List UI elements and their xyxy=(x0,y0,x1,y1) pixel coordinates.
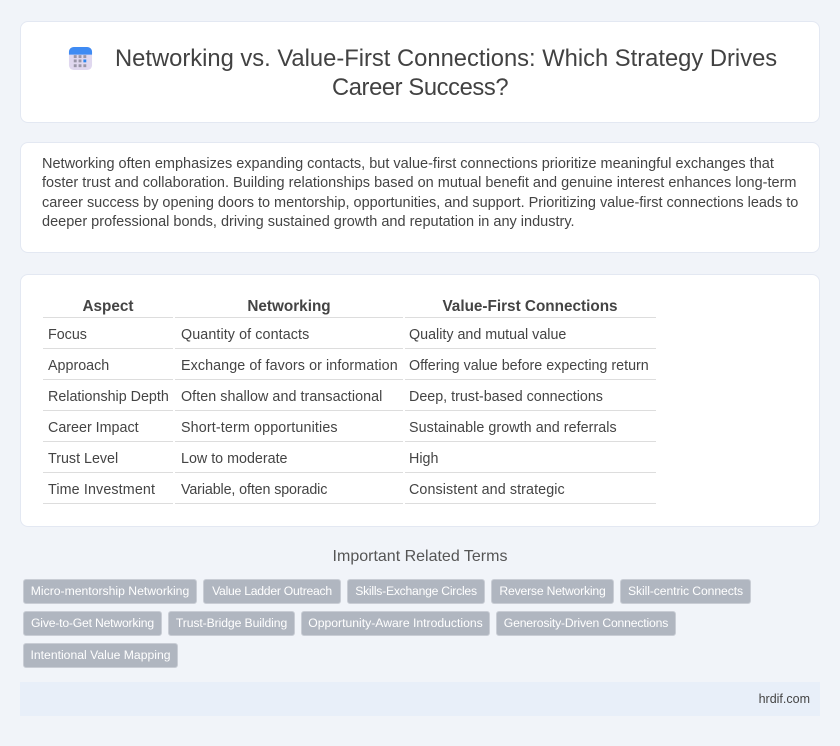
footer bar xyxy=(20,682,820,716)
comparison table: Variable, often sporadic xyxy=(181,482,327,498)
related term tags: Trust-Bridge Building xyxy=(176,616,287,630)
comparison table: Short-term opportunities xyxy=(181,420,338,436)
related term tags: Skills-Exchange Circles xyxy=(355,584,477,598)
comparison table: Time Investment xyxy=(48,482,155,498)
related term tags: Intentional Value Mapping xyxy=(30,648,171,662)
panel: intro paragraph xyxy=(20,142,820,253)
related term tags: Give-to-Get Networking xyxy=(31,616,154,630)
intro text: foster trust and collaboration. Building relationships based on mutual benefit and genuine interest enhances long-term xyxy=(42,175,796,191)
related term tags: Generosity-Driven Connections xyxy=(504,616,668,630)
heading: related terms: Important Related Terms xyxy=(333,548,507,565)
related term tags: Micro-mentorship Networking xyxy=(31,584,189,598)
icon: calendar grid xyxy=(68,47,92,70)
comparison table: Approach xyxy=(48,358,109,374)
intro text: career success by opening doors to mentorship, opportunities, and support. Prioritizing value-first connections leads to xyxy=(42,195,798,211)
footer source: hrdif.com xyxy=(759,692,810,706)
comparison table: Focus xyxy=(48,327,87,343)
intro text xyxy=(42,156,798,230)
comparison table: Sustainable growth and referrals xyxy=(409,420,617,436)
comparison table: Offering value before expecting return xyxy=(409,358,649,374)
related term tags: Reverse Networking xyxy=(499,584,606,598)
comparison table: Trust Level xyxy=(48,451,118,467)
comparison table: Value-First Connections xyxy=(442,298,618,315)
comparison table: Networking xyxy=(247,298,331,315)
comparison table: Low to moderate xyxy=(181,451,288,467)
related term tags: Skill-centric Connects xyxy=(628,584,743,598)
comparison table: High xyxy=(409,451,438,467)
related term tags: Opportunity-Aware Introductions xyxy=(308,616,483,630)
panel: comparison table xyxy=(20,274,820,527)
intro text: Networking often emphasizes expanding contacts, but value-first connections prioritize meaningful exchanges that xyxy=(42,156,774,172)
comparison table xyxy=(43,298,656,504)
comparison table: Career Impact xyxy=(48,420,139,436)
comparison table: Consistent and strategic xyxy=(409,482,565,498)
comparison table: Aspect xyxy=(82,298,134,315)
comparison table: Often shallow and transactional xyxy=(181,389,382,405)
comparison table: Relationship Depth xyxy=(48,389,169,405)
title: Networking vs. Value-First Connections: Which Strategy Drives xyxy=(115,45,777,72)
comparison table: Quality and mutual value xyxy=(409,327,566,343)
title: Career Success? xyxy=(332,74,508,101)
panel: title header xyxy=(20,21,820,123)
intro text: deeper professional bonds, driving sustained growth and reputation in any industry. xyxy=(42,214,575,230)
related term tags: Value Ladder Outreach xyxy=(212,584,332,598)
title xyxy=(115,45,777,101)
comparison table: Deep, trust-based connections xyxy=(409,389,603,405)
comparison table: Quantity of contacts xyxy=(181,327,309,343)
comparison table: Exchange of favors or information xyxy=(181,358,398,374)
related term tags xyxy=(23,579,751,668)
